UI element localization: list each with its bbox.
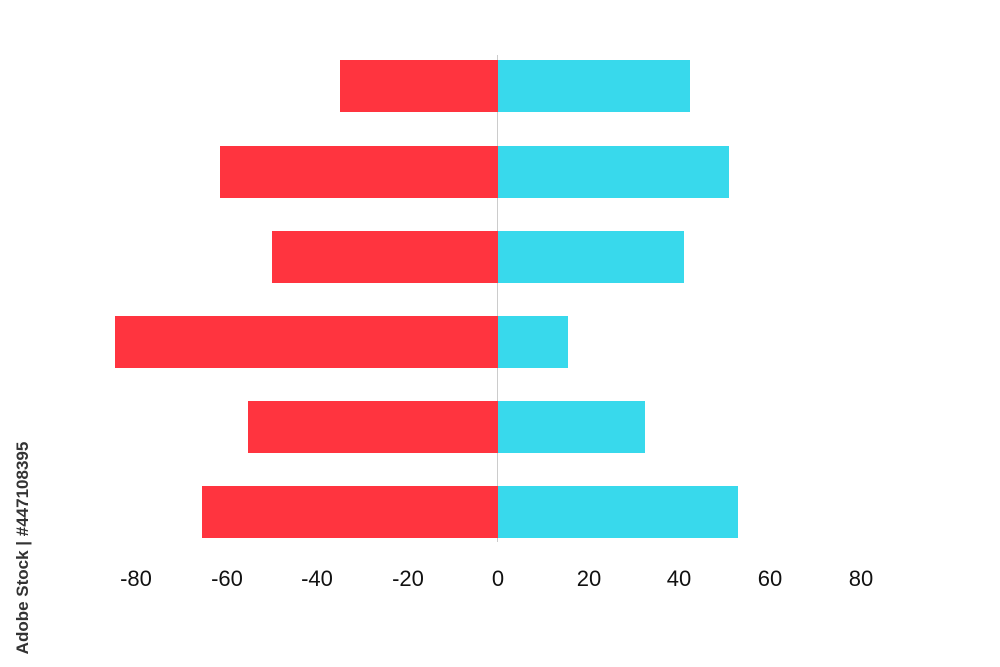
x axis labels: -60	[211, 566, 243, 591]
bar row 2	[220, 146, 729, 198]
bar row 3	[272, 231, 684, 283]
x axis labels	[120, 566, 873, 591]
x axis labels: 0	[492, 566, 504, 591]
bar row 4	[115, 316, 568, 368]
x axis labels: 20	[577, 566, 601, 591]
bar row 1	[340, 60, 690, 112]
x axis labels: -40	[301, 566, 333, 591]
watermark text: Adobe Stock | #447108395	[13, 442, 32, 654]
x axis labels: 80	[849, 566, 873, 591]
x axis labels: 40	[667, 566, 691, 591]
x axis labels: -20	[392, 566, 424, 591]
zero axis line	[497, 55, 498, 542]
x axis labels: -80	[120, 566, 152, 591]
bar row 5	[248, 401, 645, 453]
x axis labels: 60	[758, 566, 782, 591]
bar row 6	[202, 486, 738, 538]
